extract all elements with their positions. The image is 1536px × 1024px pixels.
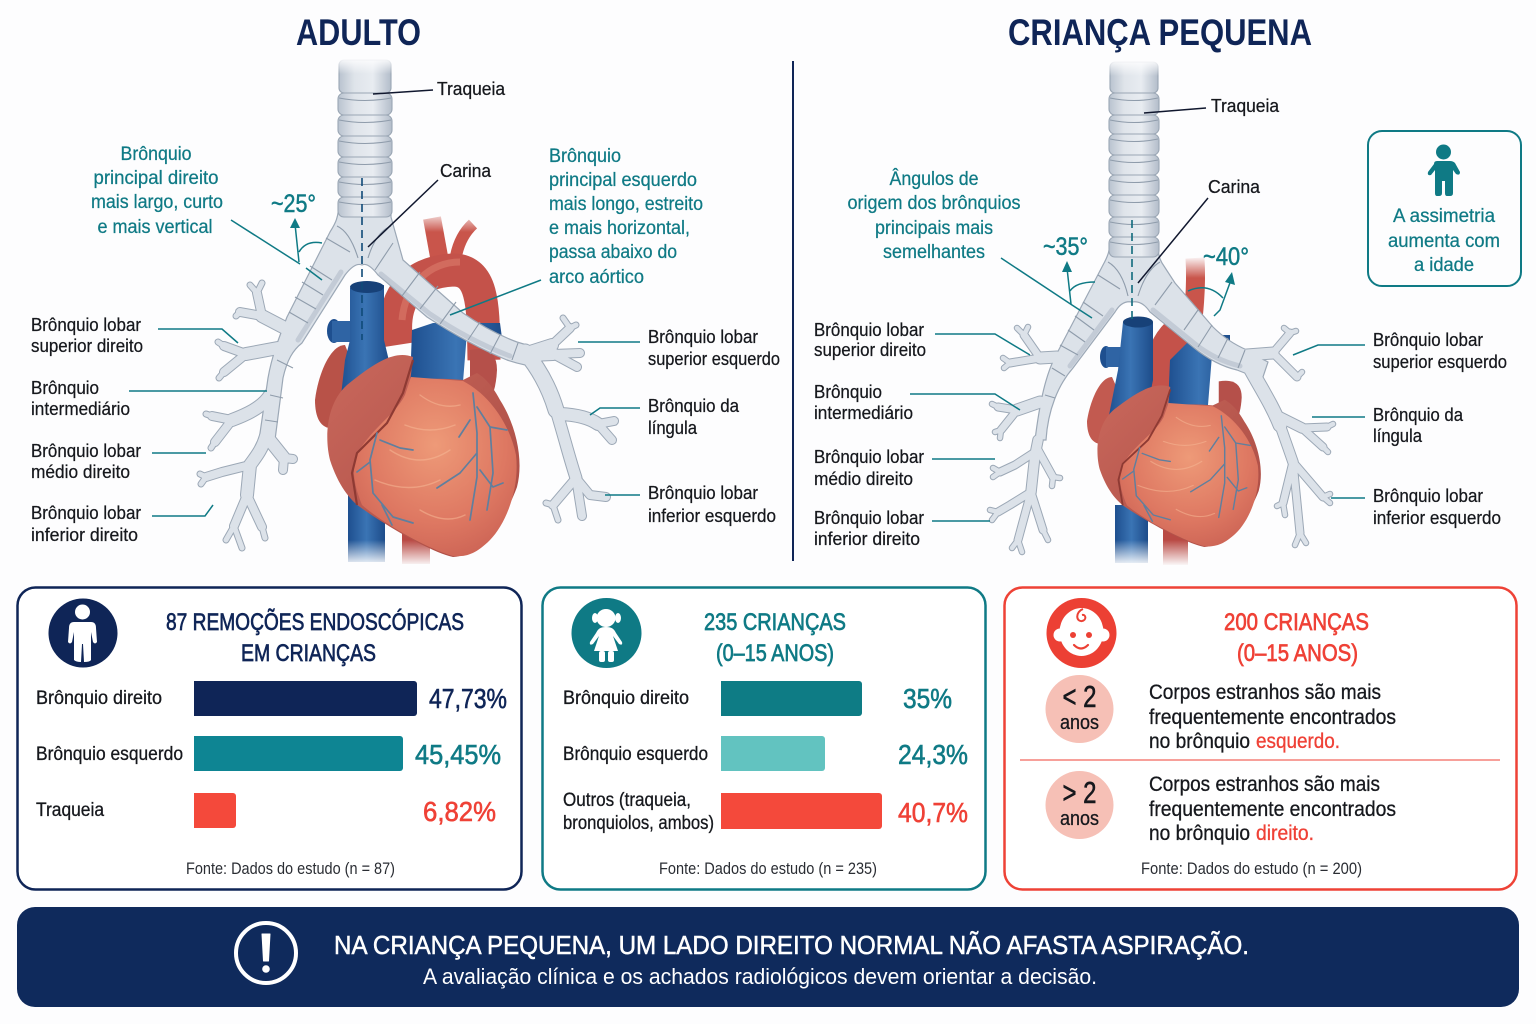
- central divider: [792, 61, 794, 561]
- child labels: right lung side: médio direito: [814, 469, 913, 489]
- panel heading: [1224, 609, 1369, 667]
- child angle: 35 degrees: [1001, 233, 1095, 318]
- adult labels: left lung side: Brônquio lobar: [648, 327, 758, 347]
- bar chart: traqueia: [36, 793, 496, 828]
- panel: 235 crianças: [542, 588, 986, 890]
- child labels: right lung side: Brônquio: [814, 382, 882, 402]
- source note: Fonte: Dados do estudo (n = 87): [186, 860, 395, 878]
- panel heading: [704, 609, 846, 667]
- source note: Fonte: Dados do estudo (n = 235): [659, 860, 877, 878]
- panel: 200 crianças: [1004, 588, 1516, 890]
- adult label: traqueia: Traqueia: [437, 79, 506, 99]
- bar chart: brônquio direito: Brônquio direito: [36, 688, 162, 709]
- bar chart: brônquio esquerdo: 45,45%: [415, 739, 501, 770]
- child labels: left lung side: Brônquio da: [1373, 405, 1464, 425]
- adult airway: trachea, main bronchi and branches: [200, 58, 614, 548]
- banner headline: NA CRIANÇA PEQUENA, UM LADO DIREITO NORMAL NÃO AFASTA ASPIRAÇÃO.: [334, 930, 1249, 960]
- child labels: right lung side: inferior direito: [814, 529, 920, 549]
- adult labels: right lung side: [31, 315, 267, 545]
- bar chart: brônquio esquerdo: 24,3%: [898, 739, 968, 770]
- adult callout: brônquio direito: [91, 144, 223, 238]
- child anatomy illustration: [990, 60, 1333, 566]
- bar chart: brônquio esquerdo: [563, 736, 968, 771]
- adult angle: 25 degrees: [231, 190, 322, 280]
- panel heading: (0–15 ANOS): [716, 640, 834, 667]
- bar chart: brônquio direito: Brônquio direito: [563, 688, 689, 709]
- child callout: ângulos: [848, 168, 1020, 263]
- bar chart: traqueia: 6,82%: [423, 796, 496, 827]
- age group: over 2 years: Corpos estranhos são mais: [1149, 773, 1380, 796]
- bar chart: brônquio direito: [563, 681, 952, 716]
- icon: baby face: [1046, 598, 1116, 668]
- child airway: trachea, main bronchi and branches: [990, 60, 1333, 552]
- child angle: 40 degrees: [1188, 243, 1249, 316]
- child labels: left lung side: Brônquio lobar: [1373, 486, 1483, 506]
- age group: under 2 years: no brônquio: [1149, 730, 1250, 753]
- age group: over 2 years: direito.: [1256, 822, 1314, 845]
- bar chart: brônquio esquerdo: [36, 736, 501, 771]
- adult labels: right lung side: superior direito: [31, 336, 143, 356]
- adult heart: [327, 349, 520, 557]
- child label: carina: Carina: [1208, 177, 1261, 197]
- bar chart: brônquio esquerdo: Brônquio esquerdo: [36, 744, 183, 765]
- age group: under 2 years: esquerdo.: [1256, 730, 1340, 753]
- adult callout: brônquio esquerdo: [450, 146, 703, 315]
- panel heading: (0–15 ANOS): [1237, 640, 1358, 667]
- child labels: left lung side: Brônquio lobar: [1373, 330, 1483, 350]
- panel heading: 87 REMOÇÕES ENDOSCÓPICAS: [166, 608, 464, 636]
- child angle: 35 degrees: ~35°: [1043, 233, 1088, 261]
- adult label: traqueia: [373, 79, 506, 99]
- bar chart: brônquio direito: [36, 681, 507, 716]
- age group: under 2 years: < 2: [1062, 679, 1096, 714]
- bar chart: brônquio direito: 47,73%: [429, 683, 507, 714]
- adult labels: left lung side: inferior esquerdo: [648, 506, 776, 526]
- adult callout: brônquio direito: e mais vertical: [98, 217, 212, 238]
- bar chart: outros: [563, 790, 968, 834]
- child labels: right lung side: Brônquio lobar: [814, 320, 924, 340]
- adult labels: left lung side: [578, 327, 780, 526]
- age group: under 2 years: anos: [1060, 712, 1099, 734]
- child labels: right lung side: Brônquio lobar: [814, 447, 924, 467]
- child label: carina: [1138, 177, 1261, 283]
- child heart: [1097, 381, 1261, 547]
- child callout: ângulos: origem dos brônquios: [848, 193, 1020, 214]
- adult labels: right lung side: Brônquio: [31, 378, 99, 398]
- source note: Fonte: Dados do estudo (n = 200): [1141, 860, 1362, 878]
- adult labels: right lung side: inferior direito: [31, 525, 138, 545]
- adult callout: brônquio direito: mais largo, curto: [91, 192, 223, 213]
- adult callout: brônquio direito: principal direito: [94, 168, 218, 189]
- adult labels: right lung side: Brônquio lobar: [31, 503, 141, 523]
- panel: 87 remoções endoscópicas: [18, 588, 522, 890]
- panel heading: 200 CRIANÇAS: [1224, 609, 1369, 636]
- age group: under 2 years: frequentemente encontrados: [1149, 706, 1396, 729]
- bar chart: outros: Outros (traqueia,: [563, 790, 691, 811]
- callout: a assimetria aumenta com a idade: aumenta com: [1388, 231, 1500, 252]
- adult anatomy illustration: [200, 58, 614, 566]
- adult labels: left lung side: Brônquio lobar: [648, 483, 758, 503]
- icon: exclamation: [236, 923, 296, 983]
- child carina midline: [1131, 220, 1133, 322]
- adult angle: 25 degrees: ~25°: [271, 190, 316, 218]
- adult carina midline: [361, 178, 363, 340]
- adult labels: right lung side: Brônquio lobar: [31, 441, 141, 461]
- age group: over 2 years: frequentemente encontrados: [1149, 798, 1396, 821]
- adult labels: right lung side: intermediário: [31, 399, 130, 419]
- callout: a assimetria aumenta com a idade: [1368, 131, 1521, 286]
- child callout: ângulos: Ângulos de: [890, 168, 978, 190]
- adult labels: right lung side: médio direito: [31, 462, 130, 482]
- adult callout: brônquio esquerdo: arco aórtico: [549, 267, 644, 288]
- icon: girl: [572, 598, 642, 668]
- panel heading: [166, 608, 464, 667]
- panel heading: EM CRIANÇAS: [241, 640, 376, 667]
- age group: under 2 years: Corpos estranhos são mais: [1149, 681, 1381, 704]
- age group: over 2 years: [1046, 771, 1396, 845]
- adult label: carina: Carina: [440, 161, 492, 181]
- title: adulto: ADULTO: [296, 12, 421, 53]
- child labels: left lung side: superior esquerdo: [1373, 352, 1507, 372]
- child labels: right lung side: Brônquio lobar: [814, 508, 924, 528]
- age group: over 2 years: anos: [1060, 808, 1099, 830]
- child labels: left lung side: [1293, 330, 1507, 528]
- adult callout: brônquio esquerdo: passa abaixo do: [549, 242, 677, 263]
- child label: traqueia: [1144, 96, 1280, 116]
- child callout: ângulos: principais mais: [875, 218, 993, 239]
- child labels: left lung side: inferior esquerdo: [1373, 508, 1501, 528]
- callout: a assimetria aumenta com a idade: a idade: [1414, 255, 1474, 276]
- banner: conclusão: [17, 907, 1519, 1007]
- child labels: left lung side: língula: [1373, 426, 1423, 446]
- child labels: right lung side: [814, 320, 1030, 549]
- child angle: 40 degrees: ~40°: [1203, 243, 1249, 271]
- adult callout: brônquio esquerdo: Brônquio: [549, 146, 621, 167]
- adult labels: left lung side: Brônquio da: [648, 396, 740, 416]
- panel heading: 235 CRIANÇAS: [704, 609, 846, 636]
- icon: person: [48, 598, 118, 668]
- bar chart: outros: bronquiolos, ambos): [563, 813, 714, 834]
- title: criança pequena: CRIANÇA PEQUENA: [1008, 12, 1312, 53]
- bar chart: brônquio direito: 35%: [903, 683, 952, 714]
- adult callout: brônquio esquerdo: mais longo, estreito: [549, 194, 703, 215]
- adult callout: brônquio esquerdo: e mais horizontal,: [549, 218, 690, 239]
- adult callout: brônquio direito: Brônquio: [120, 144, 192, 165]
- adult great vessels: [315, 210, 502, 566]
- child labels: right lung side: intermediário: [814, 403, 913, 423]
- age group: under 2 years: [1046, 675, 1396, 753]
- adult label: carina: [368, 161, 492, 247]
- bar chart: brônquio esquerdo: Brônquio esquerdo: [563, 744, 708, 765]
- adult labels: left lung side: superior esquerdo: [648, 349, 780, 369]
- adult labels: right lung side: Brônquio lobar: [31, 315, 141, 335]
- bar chart: traqueia: Traqueia: [36, 800, 104, 821]
- child great vessels: [1087, 256, 1230, 566]
- callout: a assimetria aumenta com a idade: A assimetria: [1393, 206, 1495, 227]
- child label: traqueia: Traqueia: [1211, 96, 1280, 116]
- age group: over 2 years: no brônquio: [1149, 822, 1250, 845]
- banner subline: A avaliação clínica e os achados radiológicos devem orientar a decisão.: [423, 964, 1097, 989]
- icon: child figure: [1428, 144, 1460, 196]
- child callout: ângulos: semelhantes: [883, 242, 985, 263]
- adult labels: left lung side: língula: [648, 418, 698, 438]
- adult callout: brônquio esquerdo: principal esquerdo: [549, 170, 697, 191]
- bar chart: outros: 40,7%: [898, 797, 968, 828]
- child labels: right lung side: superior direito: [814, 340, 926, 360]
- age group: over 2 years: > 2: [1062, 775, 1096, 810]
